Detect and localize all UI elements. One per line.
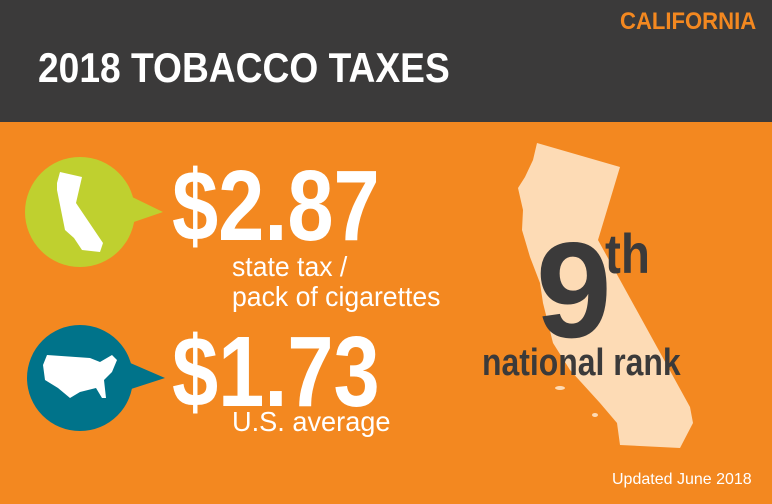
state tax label: pack of cigarettes xyxy=(232,281,440,312)
icon: california bubble xyxy=(25,157,163,267)
rank number: 9 xyxy=(536,214,612,366)
state tax label: state tax / xyxy=(232,251,347,282)
title: 2018 TOBACCO TAXES xyxy=(38,44,450,91)
state tax label xyxy=(232,251,440,312)
rank label: national rank xyxy=(482,342,681,384)
update note: Updated June 2018 xyxy=(612,471,752,488)
icon: US bubble xyxy=(27,325,165,431)
state label: CALIFORNIA xyxy=(620,8,756,35)
state tax value: $2.87 xyxy=(172,150,380,262)
icon: california map xyxy=(518,143,693,448)
header band xyxy=(0,0,772,122)
rank suffix: th xyxy=(605,222,650,285)
US average label: U.S. average xyxy=(232,406,391,437)
US average value: $1.73 xyxy=(172,316,380,428)
